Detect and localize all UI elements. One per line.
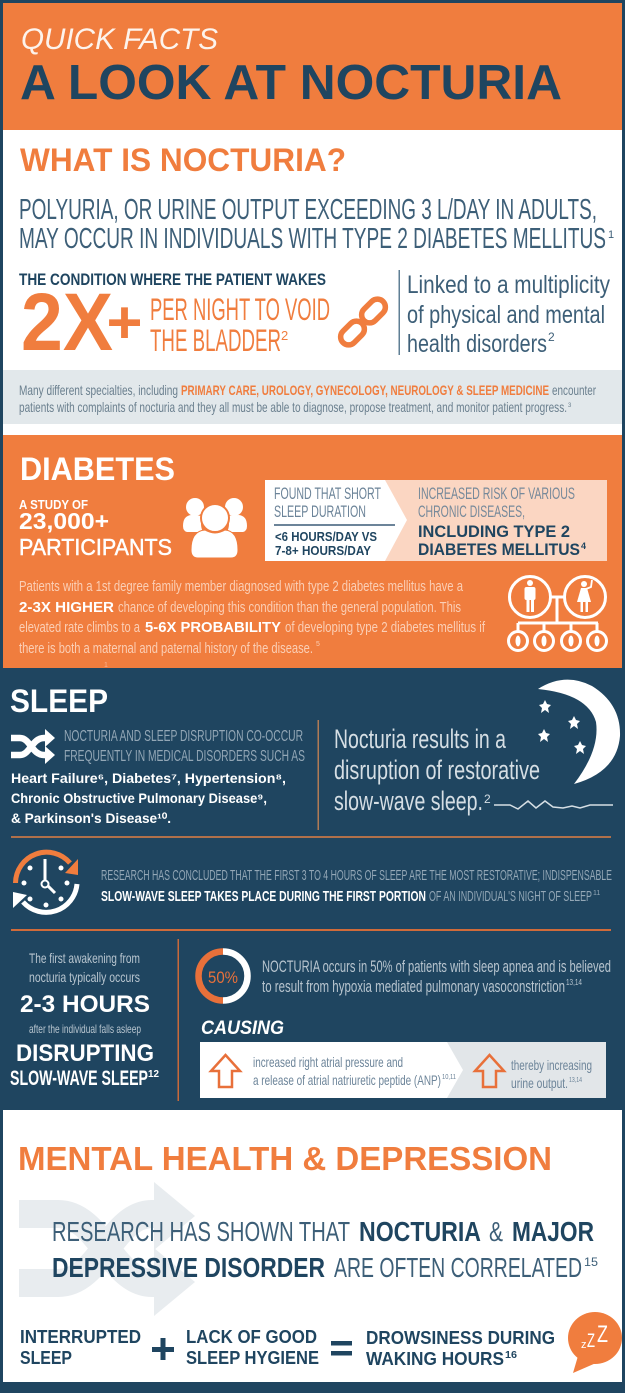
stat: 2X+: +	[106, 289, 142, 356]
text: first awakening: nocturia typically occurs	[29, 969, 140, 985]
callout: sleep duration to risk: CHRONIC DISEASES,	[418, 503, 525, 521]
icon: faded shuffle arrows	[19, 1182, 195, 1316]
text: restorative sleep statement	[334, 724, 540, 816]
text: first awakening: DISRUPTING	[16, 1040, 154, 1067]
heading: causing: CAUSING	[201, 1018, 284, 1039]
text: first hours of sleep	[101, 867, 612, 905]
icon: sleep speech bubble	[568, 1312, 622, 1373]
text: correlation statement: DEPRESSIVE DISORDER	[52, 1252, 325, 1283]
text: atrial pressure: increased right atrial pressure and	[253, 1054, 403, 1070]
text: disorders list: & Parkinson's Disease¹⁰.	[11, 810, 171, 826]
text: polyuria statement: 1	[608, 229, 614, 241]
text: linked to disorders: health disorders	[407, 330, 547, 358]
text: family history paragraph: there is both a maternal and paternal history of the disease.	[19, 640, 313, 657]
text: first awakening: 12	[148, 1069, 159, 1080]
text: disorders list	[11, 770, 286, 826]
panel: specialties band: Many different specialties, including	[19, 382, 178, 398]
stat: 2X+: 2X	[21, 277, 113, 368]
heading: sleep: SLEEP	[10, 683, 108, 719]
text: linked to disorders: 2	[548, 330, 555, 344]
text: restorative sleep statement: slow-wave sleep.	[334, 786, 483, 816]
icon: up arrow left	[211, 1055, 240, 1087]
text: urine output: urine output.	[511, 1075, 568, 1091]
text: per night to void the bladder: THE BLADDER	[150, 322, 281, 358]
text: per night to void the bladder: 2	[281, 328, 288, 343]
callout: sleep duration to risk: 7-8+ HOURS/DAY	[275, 543, 371, 558]
text: restorative sleep statement: Nocturia results in a	[334, 724, 507, 754]
text: equation: DROWSINESS DURING	[366, 1328, 555, 1348]
text: urine output: 13,14	[569, 1077, 582, 1084]
heading: what is nocturia: WHAT IS NOCTURIA?	[20, 142, 346, 178]
text: first awakening: 2-3 HOURS	[20, 991, 150, 1018]
callout: sleep duration to risk: FOUND THAT SHORT	[274, 485, 381, 503]
icon: shuffle arrows	[11, 729, 55, 764]
text: first awakening: SLOW-WAVE SLEEP	[10, 1066, 148, 1090]
text: equation: WAKING HOURS	[366, 1349, 504, 1369]
callout: causing flow	[200, 1042, 606, 1098]
text: restorative sleep statement: 2	[484, 792, 491, 806]
text: first awakening: The first awakening from	[29, 950, 140, 966]
text: first hours of sleep: SLOW-WAVE SLEEP TAKES PLACE DURING THE FIRST PORTION	[101, 888, 426, 905]
text: polyuria statement	[19, 194, 614, 255]
icon: moon and stars	[538, 680, 620, 784]
icon: clock with arrows	[13, 852, 78, 912]
text: sleep apnea statement	[262, 957, 611, 996]
panel: specialties band	[3, 370, 622, 424]
text: disorders list: Chronic Obstructive Pulmonary Disease⁹,	[11, 790, 267, 806]
text: linked to disorders	[407, 271, 610, 358]
text: family history paragraph: 5	[316, 641, 320, 648]
text: correlation statement	[52, 1216, 598, 1283]
text: family history paragraph: of developing type 2 diabetes mellitus if	[285, 619, 486, 636]
stat: study participants	[19, 497, 172, 560]
text: restorative sleep statement: disruption of restorative	[334, 755, 540, 785]
callout: sleep duration to risk	[265, 480, 607, 561]
icon: sleep wave	[494, 801, 613, 809]
text: per night to void the bladder: PER NIGHT TO VOID	[150, 291, 330, 327]
icon: family tree	[508, 576, 606, 650]
chart: 50 percent donut: 50%	[208, 968, 238, 987]
text: family history paragraph: chance of developing this condition than the general population. This	[118, 599, 461, 616]
text: co-occur statement: NOCTURIA AND SLEEP DISRUPTION CO-OCCUR	[64, 728, 303, 745]
text: sleep apnea statement: 13,14	[566, 978, 582, 987]
text: family history paragraph: elevated rate climbs to a	[19, 619, 140, 636]
stat: study participants: PARTICIPANTS	[19, 534, 172, 560]
text: equation: 16	[505, 1350, 517, 1361]
text: co-occur statement	[64, 728, 305, 765]
callout: sleep duration to risk: INCLUDING TYPE 2	[418, 522, 570, 541]
panel: specialties band: 3	[568, 403, 572, 409]
text: correlation statement: NOCTURIA	[359, 1216, 481, 1247]
text: correlation statement: MAJOR	[512, 1216, 594, 1247]
text: correlation statement: RESEARCH HAS SHOWN THAT	[52, 1216, 350, 1247]
icon: sleep speech bubble: z	[581, 1339, 586, 1351]
callout: sleep duration to risk: DIABETES MELLITUS	[418, 540, 580, 559]
text: family history paragraph	[19, 578, 486, 669]
stat: study participants: 23,000+	[19, 508, 109, 534]
text: correlation statement: 15	[584, 1255, 598, 1269]
text: urine output: thereby increasing	[511, 1057, 592, 1073]
heading: diabetes: DIABETES	[20, 451, 175, 487]
icon: up arrow right	[475, 1055, 504, 1087]
text: equation	[20, 1327, 555, 1369]
text: atrial pressure: a release of atrial natriuretic peptide (ANP)	[253, 1072, 441, 1088]
title: quick facts: QUICK FACTS	[21, 23, 218, 56]
title: a look at nocturia: A LOOK AT NOCTURIA	[20, 56, 562, 110]
text: disorders list: Heart Failure⁶, Diabetes⁷, Hypertension⁸,	[11, 770, 286, 786]
callout: sleep duration to risk: <6 HOURS/DAY VS	[275, 529, 377, 544]
text: first awakening	[10, 950, 159, 1090]
text: equation: SLEEP	[20, 1348, 72, 1368]
panel: diabetes	[3, 435, 622, 669]
text: equation: SLEEP HYGIENE	[186, 1348, 319, 1368]
text: first hours of sleep: 11	[593, 890, 600, 897]
icon: sleep speech bubble: Z	[597, 1321, 608, 1348]
panel: header	[3, 3, 622, 130]
text: equation: LACK OF GOOD	[186, 1327, 317, 1347]
text: correlation statement: &	[489, 1216, 503, 1247]
icon: chain link	[337, 296, 389, 348]
text: urine output	[511, 1057, 592, 1091]
panel: sleep	[10, 680, 620, 1101]
panel: mental health and depression	[3, 1110, 622, 1382]
icon: group of people	[183, 498, 247, 558]
panel: specialties band: encounter	[552, 382, 596, 398]
text: co-occur statement: FREQUENTLY IN MEDICAL DISORDERS SUCH AS	[64, 748, 305, 765]
text: equation: INTERRUPTED	[20, 1327, 141, 1347]
icon: sleep speech bubble: Z	[587, 1331, 595, 1352]
text: family history paragraph: 5-6X PROBABILITY	[145, 619, 281, 636]
text: family history paragraph: 1	[104, 662, 108, 669]
stat: study participants: A STUDY OF	[19, 497, 88, 512]
heading: mental health and depression: MENTAL HEALTH & DEPRESSION	[18, 1140, 552, 1177]
text: condition lead-in: THE CONDITION WHERE THE PATIENT WAKES	[19, 270, 326, 289]
callout: sleep duration to risk: SLEEP DURATION	[274, 503, 366, 521]
text: atrial pressure	[253, 1054, 456, 1088]
text: per night to void the bladder	[150, 291, 330, 358]
text: first awakening: after the individual falls asleep	[29, 1022, 141, 1036]
chart: 50 percent donut	[198, 952, 247, 1000]
callout: sleep duration to risk: 4	[581, 541, 586, 551]
panel: what is nocturia	[3, 130, 622, 435]
text: family history paragraph: 2-3X HIGHER	[19, 599, 114, 616]
text: atrial pressure: 10,11	[442, 1074, 456, 1081]
text: family history paragraph: Patients with a 1st degree family member diagnosed with type 2 diabetes mellitus have a	[19, 578, 463, 595]
